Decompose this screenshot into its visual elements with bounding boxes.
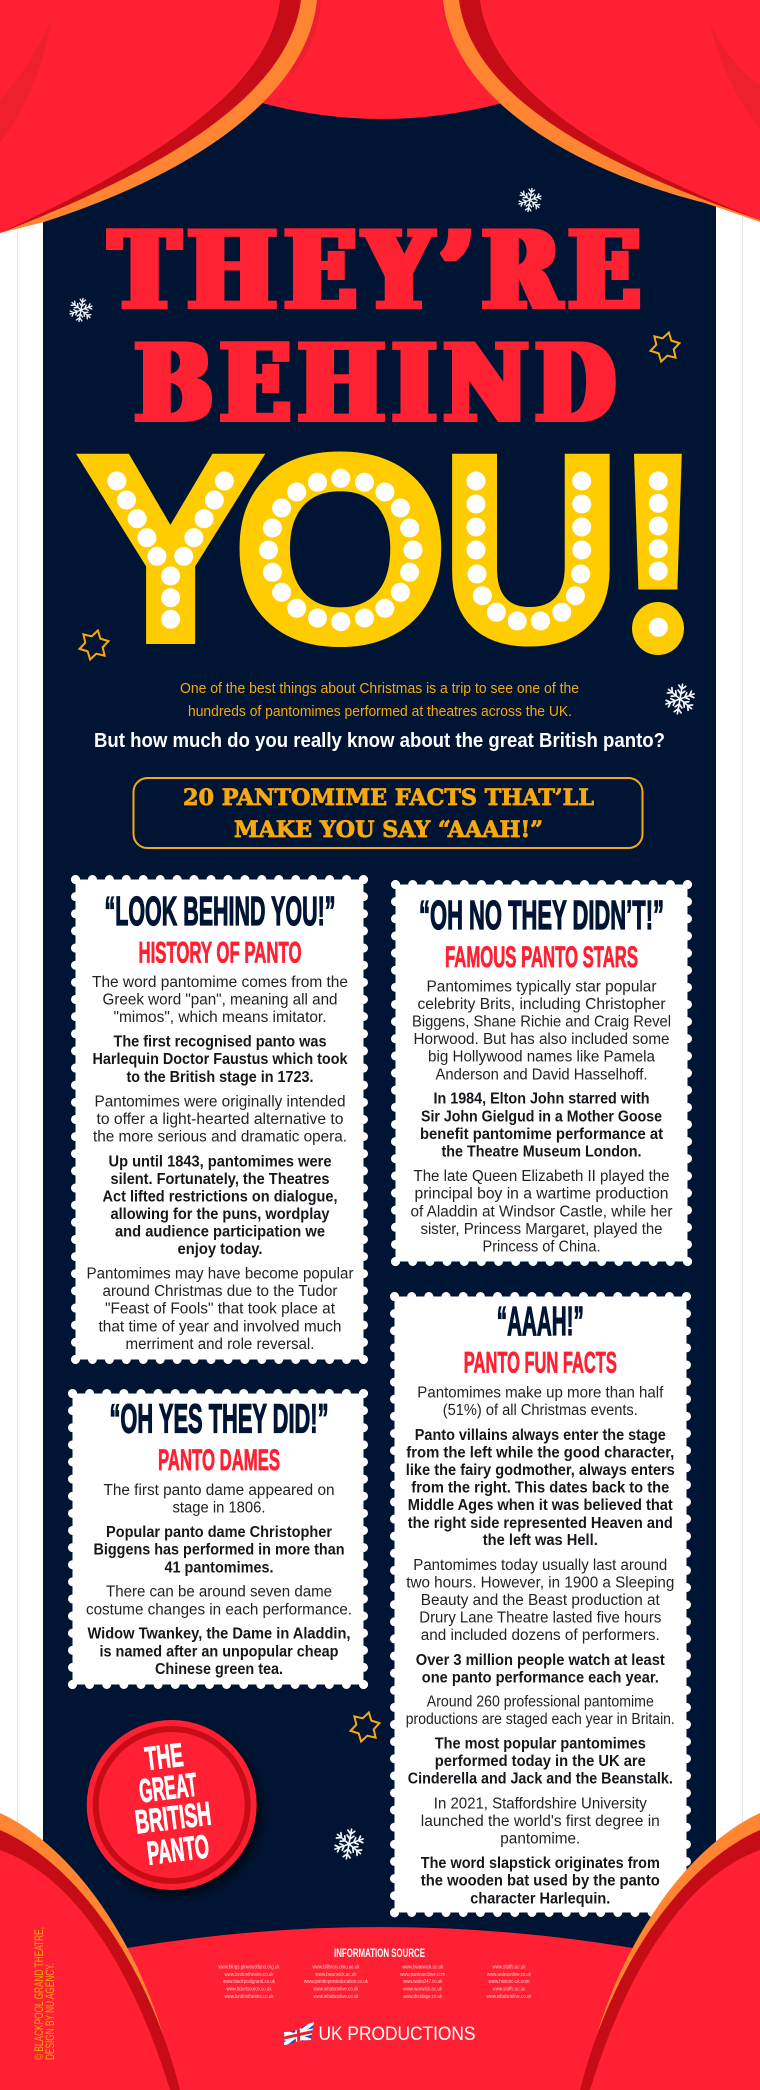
body text: Anderson and David Hasselhoff. [436,1066,648,1083]
body text: from the right. This dates back to the [411,1480,670,1497]
source links: www.bwarwick.ac.uk [315,1972,357,1978]
body text: like the fairy godmother, always enters [406,1462,675,1479]
badge: the great British panto: THE [143,1736,185,1777]
badge: the great British panto: BRITISH [133,1795,213,1840]
source links: www.ticketsource.co.uk [226,1986,272,1992]
body text: Around 260 professional pantomime [427,1694,654,1710]
source links: www.walesonline.co.uk [486,1972,531,1978]
body text: "mimos", which means imitator. [114,1009,326,1026]
body text [410,979,672,1256]
title: THEY’RE [110,208,650,334]
body text: big Hollywood names like Pamela [428,1049,655,1066]
body text: the wooden bat used by the panto [421,1873,660,1890]
credit text: DESIGN BY NU AGENCY. [45,1963,57,2060]
body text: sister, Princess Margaret, played the [420,1221,662,1238]
body text: The first recognised panto was [114,1034,326,1051]
body text: "Feast of Fools" that took place at [105,1301,336,1318]
body text: productions are staged each year in Britain. [406,1711,675,1728]
body text: The late Queen Elizabeth II played the [414,1168,670,1185]
intro text [180,680,579,720]
source links: www.pantoarchive.com [399,1972,445,1978]
body text: 41 pantomimes. [164,1559,274,1576]
body text: The word slapstick originates from [421,1855,660,1872]
panel: panto fun facts [394,1296,687,1913]
badge: the great British panto: PANTO [145,1827,211,1872]
body text: from the left while the good character, [406,1445,674,1462]
body text: There can be around seven dame [106,1584,332,1601]
source links: www.staffs.ac.uk [492,1964,526,1970]
body text: to offer a light-hearted alternative to [96,1111,344,1128]
body text: the left was Hell. [483,1532,598,1549]
footer red stage [127,1927,633,2090]
source links: www.bwarwick.ac.uk [401,1964,443,1970]
body text: Panto villains always enter the stage [415,1427,666,1444]
body text: Pantomimes were originally intended [94,1093,346,1110]
logo: UK Productions [284,2022,475,2045]
body text: Popular panto dame Christopher [106,1524,332,1541]
icon: star top right [651,333,679,361]
heading: information source: INFORMATION SOURCE [334,1948,425,1960]
source links: www.warwick.ac.uk [402,1986,442,1992]
body text: and audience participation we [115,1224,325,1241]
body text: In 1984, Elton John starred with [434,1091,650,1108]
body text: Over 3 million people watch at least [416,1652,665,1669]
icon: star left [80,631,108,659]
body text: Cinderella and Jack and the Beanstalk. [408,1771,673,1788]
panel: panto dames [72,1394,364,1685]
body text: two hours. However, in 1900 a Sleeping [406,1574,674,1591]
body text: that time of year and involved much [98,1318,342,1335]
badge: the great British panto: GREAT [137,1766,199,1809]
body text [406,1385,675,1907]
body text: merriment and role reversal. [126,1336,314,1353]
title [110,208,650,447]
body text: Harlequin Doctor Faustus which took [92,1051,348,1068]
body text: Drury Lane Theatre lasted five hours [419,1609,662,1626]
body text: Horwood. But has also included some [414,1031,670,1048]
panel: history of panto [76,880,364,1360]
bottom left curtain [0,1813,180,2090]
icon: snowflake bottom [332,1827,366,1861]
bottom right curtain [580,1813,760,2090]
body text: Greek word "pan", meaning all and [102,991,338,1008]
intro question: But how much do you really know about the great British panto? [94,730,665,752]
body text: launched the world's first degree in [421,1813,660,1830]
right curtain [443,0,760,222]
source links: www.whatsonlive.co.uk [313,1994,359,2000]
body text: of Aladdin at Windsor Castle, while her [410,1203,672,1220]
title: YOU! with light bulbs: ! [614,402,702,695]
source links: www.historic-uk.com [488,1979,530,1985]
source links: www.staffs.ac.uk [492,1986,526,1992]
body text: to the British stage in 1723. [126,1069,314,1086]
body text: Sir John Gielgud in a Mother Goose [421,1108,662,1125]
body text: the more serious and dramatic opera. [93,1129,347,1146]
body text: Princess of China. [482,1239,600,1256]
body text: Pantomimes typically star popular [426,979,656,996]
body text: Chinese green tea. [155,1661,283,1678]
source links: www.whatsonlive.co.uk [486,1994,532,2000]
banner: 20 pantomime facts [134,778,642,848]
subheading: PANTO DAMES [158,1444,280,1477]
body text: Middle Ages when it was believed that [408,1497,673,1514]
body text: one panto performance each year. [422,1669,659,1686]
heading: “LOOK BEHIND YOU!” [104,888,336,934]
source links: www.thestage.co.uk [402,1994,442,2000]
source links: www.blackpoolgrand.co.uk [222,1979,275,1985]
title: YOU! with light bulbs [76,452,684,655]
title: YOU! with light bulbs: O [234,402,448,696]
body text: silent. Fortunately, the Theatres [110,1171,330,1188]
body text: The most popular pantomimes [435,1736,646,1753]
intro text: hundreds of pantomimes performed at theatres across the UK. [188,703,572,720]
body text: celebrity Brits, including Christopher [418,996,666,1013]
body text: character Harlequin. [470,1890,610,1907]
source links: www.londontheatre.co.uk [224,1994,274,2000]
source links: www.bllibrary.dmu.ac.uk [312,1964,360,1970]
source links: www.whatsonlive.co.uk [313,1986,359,1992]
body text: principal boy in a wartime production [414,1186,668,1203]
title: YOU! with light bulbs: U [442,402,620,695]
body text: Widow Twankey, the Dame in Aladdin, [88,1626,350,1643]
body text: Act lifted restrictions on dialogue, [102,1188,338,1205]
body text: and included dozens of performers. [421,1627,660,1644]
body text [86,974,354,1353]
icon: snowflake right [663,682,697,716]
body text: In 2021, Staffordshire University [434,1796,647,1813]
body text: Up until 1843, pantomimes were [108,1153,332,1170]
body text: Beauty and the Beast production at [421,1592,660,1609]
heading: “OH YES THEY DID!” [110,1395,328,1441]
banner: 20 pantomime facts: 20 PANTOMIME FACTS THAT’LL [183,785,594,811]
body text: Biggens, Shane Richie and Craig Revel [412,1014,671,1031]
body text: the Theatre Museum London. [442,1144,642,1161]
body text: (51%) of all Christmas events. [443,1402,638,1419]
body text: Biggens has performed in more than [94,1542,344,1559]
banner: 20 pantomime facts: MAKE YOU SAY “AAAH!” [234,817,543,843]
body text: is named after an unpopular cheap [100,1643,338,1660]
body text: the right side represented Heaven and [408,1515,673,1532]
body text: allowing for the puns, wordplay [110,1206,330,1223]
body text: The word pantomime comes from the [92,974,348,991]
body text [86,1482,352,1678]
source links: www.pointtopointeducation.co.uk [303,1979,368,1985]
heading: “AAAH!” [497,1298,584,1344]
logo: UK Productions: UK PRODUCTIONS [318,2024,476,2045]
source links [218,1964,532,2000]
body text: benefit pantomime performance at [420,1126,663,1143]
title: YOU! with light bulbs: Y [80,402,260,695]
body text: Pantomimes may have become popular [86,1266,354,1282]
body text: Pantomimes make up more than half [417,1385,664,1402]
subheading: PANTO FUN FACTS [464,1347,617,1380]
body text: around Christmas due to the Tudor [102,1283,338,1300]
body text: Pantomimes today usually last around [413,1557,667,1574]
source links: www.blogs.glowscotland.org.uk [218,1964,280,1970]
top curtains [0,0,760,233]
icon: snowflake left [68,296,94,324]
left curtain [0,0,317,233]
body text: performed today in the UK are [435,1753,646,1770]
body text: enjoy today. [178,1241,262,1258]
subheading: HISTORY OF PANTO [138,936,302,969]
light bulbs [107,469,668,637]
credit text: © BLACKPOOL GRAND THEATRE, [34,1927,46,2060]
icon: snowflake top right [517,186,543,214]
source links: www.londontheatre.co.uk [224,1972,274,1978]
credit text [34,1927,57,2060]
source links: www.wales247.co.uk [402,1979,442,1985]
centre valance [262,0,502,119]
body text: costume changes in each performance. [86,1601,352,1618]
body text: stage in 1806. [172,1500,266,1517]
body text: The first panto dame appeared on [104,1482,334,1499]
intro text: One of the best things about Christmas is a trip to see one of the [180,680,579,697]
icon: union flag [284,2022,314,2045]
icon: star bottom [351,1713,379,1741]
body text: pantomime. [500,1831,580,1848]
title: BEHIND [136,321,624,447]
panel: famous panto stars [396,884,688,1262]
badge: the great British panto [87,1720,257,1890]
